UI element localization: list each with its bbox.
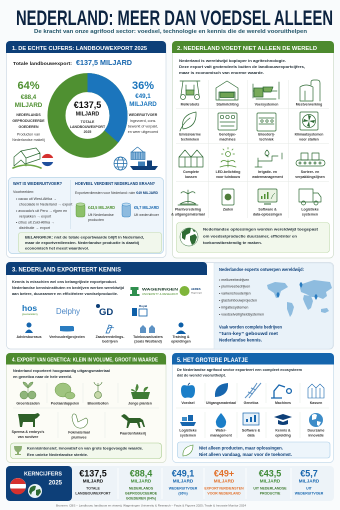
important callout: maar de exportverdiensten. Nederlandse productie is daarbij bbox=[25, 240, 139, 245]
tech: melkrobots: Melkrobots bbox=[181, 102, 199, 106]
eco: genetica bbox=[244, 383, 261, 405]
panel 4 intro bbox=[13, 368, 110, 379]
projects icon bbox=[49, 326, 85, 339]
logo: hos: hos bbox=[22, 303, 37, 313]
icon: globe outline bbox=[114, 157, 127, 170]
panel 4 heading: 4. EXPORT VAN GENETICA: KLEIN IN VOLUME, GROOT IN WAARDE bbox=[12, 358, 159, 364]
total export line: Totale landbouwexport: bbox=[13, 61, 73, 66]
what is re-export text: • citrus uit Zuid-Afrika → bbox=[16, 220, 55, 224]
panel 1: de echte cijfers bbox=[6, 41, 166, 258]
tech: broederijtechniek: Broederij- bbox=[258, 132, 276, 136]
logo: gd bbox=[96, 304, 113, 318]
tech: klimaatsystemen: Klimaatsystemen bbox=[295, 132, 323, 136]
stat: uit wederuitvoer: €5,7 bbox=[300, 468, 318, 478]
callout: trophy message bbox=[10, 443, 162, 458]
eco: voedsel: Voedsel bbox=[181, 401, 195, 405]
training icon bbox=[171, 322, 191, 344]
callout: leaf message: Niet alleen producten, maar oplossingen. bbox=[199, 446, 283, 450]
stat: nederlands: NEDERLANDS bbox=[129, 486, 154, 490]
tech: plantveredeling bbox=[171, 190, 205, 216]
important callout: BELANGRIJK: niet de totale exportwaarde blijft in Nederland, bbox=[25, 234, 144, 240]
what is re-export text: Voorbeelden: bbox=[13, 190, 34, 194]
panel 5 heading bbox=[172, 353, 334, 364]
callout: leaf message bbox=[178, 442, 330, 458]
total export line bbox=[13, 58, 133, 67]
callout: leaf message: Niet alleen vandaag, maar voor de toekomst. bbox=[199, 452, 292, 457]
genetics: chicken: pluimvee bbox=[71, 436, 87, 440]
stat: exportverdiensten: VOOR NEDERLAND bbox=[207, 492, 241, 496]
stat: nederlands: GOEDEREN (64%) bbox=[126, 496, 156, 500]
left stat: 64 percent bbox=[12, 80, 45, 142]
left stat: 64 percent: €88,4 bbox=[21, 94, 37, 101]
panel 3 intro: Kennis is misschien wel ons belangrijkste exportproduct. bbox=[12, 279, 117, 284]
genetics: cow: van rundvee bbox=[18, 435, 38, 439]
total export line: €137,5 MILJARD bbox=[76, 58, 133, 67]
genetics: cow: Sperma & embryo's bbox=[12, 430, 44, 434]
panel 2 intro: Nederland is wereldwijd koploper in agritechnologie. bbox=[179, 58, 286, 63]
what is re-export text: • avocado's uit Peru → rijpen en bbox=[16, 209, 67, 213]
tech: sorteer: verpakkingslijnen bbox=[295, 175, 325, 179]
tech: complete kassen bbox=[179, 150, 203, 179]
panel 2 intro: Deze export valt grotendeels buiten de landbouwexportcijfers, bbox=[179, 64, 305, 69]
tech: broederijtechniek: techniek bbox=[259, 138, 274, 142]
panel 2 intro bbox=[179, 58, 305, 75]
tech: emissiearme technieken: technieken bbox=[181, 138, 199, 142]
panel 4 heading bbox=[6, 353, 166, 364]
turnkey statement: Vaak worden complete bedrijven bbox=[219, 324, 282, 330]
left stat: 64 percent: GOEDEREN bbox=[18, 125, 39, 129]
advisory icon bbox=[16, 322, 42, 339]
eco: machines bbox=[271, 385, 291, 405]
left stat: 64 percent: 64% bbox=[17, 80, 40, 92]
tech: complete kassen: Complete bbox=[183, 170, 199, 174]
eco: kennis bbox=[274, 414, 292, 438]
important callout bbox=[18, 232, 162, 252]
eco: kennis: Kennis & bbox=[275, 428, 291, 432]
what is re-export text: chocolade in Nederland → export bbox=[19, 202, 72, 206]
panel 4 intro: en genetica naar de hele wereld. bbox=[13, 374, 72, 379]
tech: complete kassen: kassen bbox=[185, 175, 197, 179]
panel 2 heading: 2. NEDERLAND VOEDT NIET ALLEEN DE WERELD bbox=[177, 46, 317, 52]
icon: globe bbox=[28, 484, 42, 498]
eco: logistiek: Logistieke bbox=[179, 428, 197, 432]
stat: wederuitvoer: MILJARD bbox=[173, 478, 194, 484]
panel 2 intro: maar is economisch van enorme waarde. bbox=[179, 70, 264, 75]
genetics: horse bbox=[120, 414, 146, 436]
eco: software bbox=[242, 413, 261, 438]
tech: irrigatie: watermanagement bbox=[251, 175, 284, 179]
stat: uit wederuitvoer: WEDERUITVOER bbox=[295, 492, 324, 496]
how much earned text: HOEVEEL VERDIENT NEDERLAND ERAAN? bbox=[75, 181, 155, 186]
icon: blue coins bbox=[122, 203, 130, 217]
genetics: jonge planten: Jonge planten bbox=[128, 402, 152, 406]
left stat: 64 percent: Nederlandse makelij bbox=[12, 138, 45, 142]
stat: uit wederuitvoer bbox=[295, 468, 324, 496]
eco: uitgangsmateriaal: Uitgangsmateriaal bbox=[206, 401, 236, 405]
breeding icon: Zaadveredelings- bbox=[96, 335, 125, 339]
stat: nederlandse productie: UIT NEDERLANDSE bbox=[253, 486, 287, 490]
eco: duurzaam: Duurzame bbox=[308, 428, 325, 432]
tech: voersystemen: Voersystemen bbox=[255, 102, 278, 106]
genetics: groentezaden: Groentezaden bbox=[16, 402, 40, 406]
tech: emissiearme technieken: Emissiearme bbox=[179, 132, 201, 136]
subtitle: De kracht van onze agrifood sector: voedsel, technologie en kennis die de wereld vooruithelpen bbox=[34, 29, 308, 35]
genetics: pootaardappelen bbox=[51, 383, 79, 406]
logo: aeres: AERES bbox=[191, 287, 201, 291]
training icon: Training & bbox=[172, 335, 190, 339]
stat: totaal bbox=[75, 468, 111, 496]
tech: software: Software & bbox=[258, 208, 277, 212]
expert list: • voedselveiligheidsystemen bbox=[219, 312, 264, 316]
panel 3 intro: aan betere, duurzamere en efficiëntere voedselproductie. bbox=[12, 291, 118, 296]
turnkey statement: Nederlandse kennis. bbox=[219, 338, 262, 342]
tech: emissiearme technieken bbox=[179, 112, 201, 142]
tech: logistiek bbox=[299, 189, 321, 216]
what is re-export text: distributie → export bbox=[19, 226, 50, 230]
key figures band bbox=[6, 466, 334, 501]
tech: plantveredeling: Plantveredeling bbox=[175, 208, 201, 212]
turnkey statement: “turn-key” gebouwd met bbox=[219, 331, 279, 336]
tech: logistiek: systemen bbox=[302, 212, 318, 216]
right stat: 36 percent: MILJARD bbox=[129, 101, 157, 108]
kerncijfers box bbox=[6, 466, 72, 501]
panel 3 heading: 3. NEDERLAND EXPORTEERT KENNIS bbox=[12, 266, 122, 274]
genetics: jonge planten bbox=[128, 384, 152, 406]
what is re-export text: WAT IS WEDERUITVOER? bbox=[13, 181, 62, 186]
icon: dutch flag bbox=[42, 154, 54, 166]
tech: melkrobots bbox=[180, 81, 200, 106]
eco: voedsel bbox=[181, 383, 195, 405]
donut chart: 2025 bbox=[84, 130, 91, 134]
genetics: bloembollen: Bloembollen bbox=[87, 402, 109, 406]
expert list: • varkenshouderijen bbox=[219, 292, 251, 296]
left stat: 64 percent: NEDERLANDS bbox=[16, 113, 41, 117]
callout: globe message: Nederlandse oplossingen worden wereldwijd toegepast bbox=[203, 226, 319, 232]
eco: water: management bbox=[210, 434, 233, 438]
donut chart: LANDBOUWEXPORT bbox=[70, 125, 106, 129]
eco: logistiek: systemen bbox=[180, 434, 196, 438]
genetics: groentezaden bbox=[16, 382, 40, 406]
panel 1 heading: 1. DE ECHTE CIJFERS: LANDBOUWEXPORT 2025 bbox=[12, 46, 147, 52]
stat: totaal: LANDBOUWEXPORT bbox=[75, 492, 111, 496]
projects icon: Veehouderijprojecten bbox=[49, 335, 85, 339]
eco: kassen: Kassen bbox=[310, 401, 322, 405]
stat: wederuitvoer bbox=[169, 468, 198, 496]
what is re-export text bbox=[13, 181, 72, 230]
earnings: Dutch products: producten bbox=[88, 218, 104, 222]
box: experts worldwide bbox=[214, 263, 333, 349]
tech: logistiek: Logistieke bbox=[301, 208, 319, 212]
genetics: chicken: Fokmateriaal bbox=[68, 430, 90, 434]
stat: wederuitvoer: €49,1 bbox=[172, 468, 194, 478]
logo: delphy: Delphy bbox=[56, 306, 81, 316]
stat: nederlands: MILJARD bbox=[131, 478, 152, 484]
left stat: 64 percent: Producten van bbox=[17, 132, 40, 136]
kerncijfers box: KERNCIJFERS bbox=[24, 472, 62, 478]
donut chart: TOTALE bbox=[81, 120, 95, 124]
tech: mestverwerking: Mestverwerking bbox=[296, 102, 322, 106]
logo: wageningen: UNIVERSITY & RESEARCH bbox=[142, 293, 178, 296]
donut chart: €137,5 bbox=[74, 100, 101, 110]
stat: nederlands: GEPRODUCEERDE bbox=[125, 492, 158, 496]
box: experts worldwide: Nederlandse experts ontwerpen wereldwijd: bbox=[219, 267, 305, 272]
eco: water: Water- bbox=[216, 428, 227, 432]
panel 2 heading bbox=[172, 41, 334, 53]
panel 4 intro: Nederland exporteert hoogwaardig uitgangsmateriaal bbox=[13, 368, 110, 373]
stat: nederlands bbox=[125, 468, 158, 500]
stat: exportverdiensten: €49+ bbox=[214, 468, 234, 478]
world map bbox=[267, 280, 332, 317]
tech: stalinrichting: Stalinrichting bbox=[216, 102, 239, 106]
important callout: economisch het meest waardevol. bbox=[25, 246, 89, 250]
training icon: opleidingen bbox=[171, 340, 191, 344]
eco: duurzaam bbox=[308, 413, 325, 438]
tech: sorteer bbox=[295, 153, 325, 179]
expert list bbox=[219, 278, 264, 316]
expert list: • irrigatiesystemen bbox=[219, 306, 248, 310]
panel 3 intro: Nederlandse kennisinstituten en bedrijven werken wereldwijd bbox=[12, 285, 125, 290]
eco: kassen bbox=[308, 384, 324, 405]
panel 4: export van genetica bbox=[6, 353, 166, 462]
logo: aeres: Wageningen bbox=[191, 292, 202, 294]
panel 1 heading bbox=[6, 41, 166, 53]
callout: globe message bbox=[176, 222, 330, 252]
eco: machines: Machines bbox=[275, 401, 291, 405]
panel 5: het grotere plaatje bbox=[172, 353, 334, 462]
right stat: 36 percent: en weer uitgevoerd bbox=[128, 130, 158, 134]
stat: uit wederuitvoer: UIT bbox=[306, 486, 313, 490]
stat: exportverdiensten: EXPORTVERDIENSTEN bbox=[204, 486, 244, 490]
tech: zaden: Zaden bbox=[223, 208, 233, 212]
right stat: 36 percent: WEDERUITVOER bbox=[129, 113, 158, 117]
expert list: • melkveebedrijven bbox=[219, 278, 249, 282]
eco: software: data bbox=[247, 434, 255, 438]
left stat: 64 percent: GEPRODUCEERDE bbox=[12, 119, 45, 123]
tech: klimaatsystemen bbox=[295, 112, 323, 142]
icon: flag bbox=[10, 478, 26, 494]
panel 3 intro bbox=[12, 279, 125, 296]
stat: nederlandse productie: PRODUCTIE bbox=[260, 492, 281, 496]
earnings: re-export: €5,7 MILJARD bbox=[134, 205, 159, 210]
info box: wederuitvoer bbox=[8, 178, 164, 254]
right stat: 36 percent: Ingevoerd, cons. bbox=[130, 119, 156, 123]
logo: wageningen: WAGENINGEN bbox=[142, 288, 179, 292]
tech: zaden bbox=[222, 189, 234, 212]
panel 2: nederland voedt bbox=[171, 41, 334, 258]
logo: royal bbox=[132, 304, 147, 316]
tech: genotypemachines bbox=[218, 113, 237, 142]
stat: totaal: MILJARD bbox=[83, 478, 104, 484]
donut chart bbox=[56, 83, 118, 148]
eco: water bbox=[210, 413, 233, 438]
breeding icon bbox=[96, 325, 125, 344]
tech: software: data-oplossingen bbox=[253, 212, 282, 216]
tech: genotypemachines: machines bbox=[219, 138, 236, 142]
stat: nederlandse productie: MILJARD bbox=[260, 478, 281, 484]
expert list: • pluimveebedrijven bbox=[219, 284, 250, 288]
panel 5 intro: dat de wereld vooruithelpt. bbox=[177, 372, 226, 378]
panel 5 intro: De Nederlandse agrifood sector exporteert een compleet ecosysteem bbox=[177, 367, 303, 372]
breeding icon: bedrijven bbox=[102, 340, 118, 344]
tech: stalinrichting bbox=[216, 81, 239, 106]
cluster icon: (zoals Westland) bbox=[134, 340, 162, 344]
stat: totaal: TOTALE bbox=[86, 486, 100, 490]
tech: led verlichting: LED-belichting bbox=[216, 170, 240, 174]
donut chart: MILJARD bbox=[76, 112, 99, 118]
stat: exportverdiensten bbox=[204, 468, 244, 496]
right stat: 36 percent bbox=[128, 80, 158, 134]
eco: uitgangsmateriaal bbox=[206, 383, 236, 405]
expert list: • glastuinbouwprojecten bbox=[219, 298, 257, 302]
genetics: cow bbox=[12, 413, 44, 439]
left stat: 64 percent: MILJARD bbox=[15, 102, 43, 109]
tech: irrigatie: Irrigatie- en bbox=[258, 170, 277, 174]
genetics: horse: Paardenfokkerij bbox=[120, 432, 146, 436]
cluster icon bbox=[133, 325, 163, 344]
icon: greenhouse bbox=[13, 148, 41, 168]
tech: broederijtechniek bbox=[257, 113, 276, 142]
eco: duurzaam: innovatie bbox=[308, 434, 324, 438]
how much earned text: Exportverdiensten voor Nederland: ruim €49 MILJARD bbox=[75, 191, 158, 195]
stat: uit wederuitvoer: MILJARD bbox=[299, 478, 320, 484]
right stat: 36 percent: 36% bbox=[132, 80, 154, 92]
stat: exportverdiensten: MILJARD bbox=[214, 478, 235, 484]
genetics: bloembollen bbox=[87, 382, 109, 406]
earnings: re-export: Uit wederuitvoer bbox=[134, 213, 160, 217]
stat: nederlandse productie bbox=[253, 468, 287, 496]
stat: wederuitvoer: (36%) bbox=[178, 492, 188, 496]
tech: led verlichting: voor tuinbouw bbox=[216, 175, 240, 179]
genetics: pootaardappelen: Pootaardappelen bbox=[51, 402, 79, 406]
stat: totaal: €137,5 bbox=[79, 468, 107, 478]
earnings: Dutch products: €43,5 MILJARD bbox=[88, 205, 115, 210]
turnkey statement bbox=[219, 324, 282, 342]
earnings: Dutch products bbox=[88, 205, 115, 222]
icon: trophy bbox=[14, 446, 22, 455]
tech: software bbox=[253, 189, 282, 216]
genetics: chicken bbox=[68, 414, 90, 440]
logo: gd: GD bbox=[99, 307, 113, 318]
eco: software: Software & bbox=[242, 428, 261, 432]
tech: irrigatie bbox=[251, 150, 284, 179]
eco: genetica: Genetica bbox=[244, 401, 258, 405]
icon: leaf bbox=[183, 445, 193, 456]
callout: globe message: om voedselproductie duurzamer, efficiënter en bbox=[203, 234, 298, 238]
eco: logistiek bbox=[179, 415, 197, 438]
panel 3: nederland exporteert kennis bbox=[6, 262, 334, 349]
sources: Bronnen: CBS – Landbouw, landbouw en visserij; Wageningen University & Research – Facts & Figures 2025; Trade & Innovate Monitor 2024 bbox=[56, 504, 246, 508]
tech: mestverwerking bbox=[296, 80, 322, 106]
tech: plantveredeling: & uitgangsmateriaal bbox=[171, 212, 205, 216]
stat: wederuitvoer: WEDERUITVOER bbox=[169, 486, 198, 490]
logo: hos: greenacademy bbox=[22, 313, 39, 316]
logo: wageningen bbox=[130, 287, 179, 296]
tech: sorteer: Sorteer- en bbox=[301, 170, 319, 174]
kerncijfers box: 2025 bbox=[49, 480, 63, 486]
advisory icon: Adviesbureaus bbox=[16, 335, 42, 339]
panel 5 heading: 5. HET GROTERE PLAATJE bbox=[177, 358, 248, 364]
earnings: re-export bbox=[134, 205, 160, 217]
right stat: 36 percent: €49,1 bbox=[135, 93, 151, 100]
how much earned text bbox=[75, 181, 158, 195]
stat: nederlandse productie: €43,5 bbox=[259, 468, 281, 478]
tech: klimaatsystemen: voor stallen bbox=[299, 138, 319, 142]
cluster icon: Tuinbouwclusters bbox=[133, 335, 163, 339]
tech: led verlichting bbox=[216, 148, 240, 179]
what is re-export text: • cacao uit West-Afrika → bbox=[16, 197, 57, 201]
callout: globe message: toekomstbestendig te maken. bbox=[203, 240, 262, 245]
logo: royal: Royal bbox=[139, 304, 147, 308]
icon: container and ship bbox=[130, 147, 158, 170]
callout: trophy message: Kennisintensief, innovatief en van grote toegevoegde waarde. bbox=[27, 446, 143, 450]
stat: nederlands: €88,4 bbox=[130, 468, 152, 478]
right stat: 36 percent: bewerkt of verpakt, bbox=[128, 124, 158, 128]
eco: kennis: opleiding bbox=[275, 434, 291, 438]
logo: aeres bbox=[180, 286, 202, 296]
panel 3 heading bbox=[6, 262, 207, 275]
tech: voersystemen bbox=[253, 82, 279, 106]
icon: green coins bbox=[76, 203, 85, 217]
icon: green globe bbox=[180, 228, 198, 246]
what is re-export text: verpakken → export bbox=[19, 214, 51, 218]
tech: genotypemachines: Genotype- bbox=[219, 132, 237, 136]
callout: trophy message: Een unieke Nederlandse sterkte. bbox=[27, 452, 88, 457]
earnings: Dutch products: Uit Nederlandse bbox=[88, 213, 114, 217]
panel 5 intro bbox=[177, 367, 303, 378]
